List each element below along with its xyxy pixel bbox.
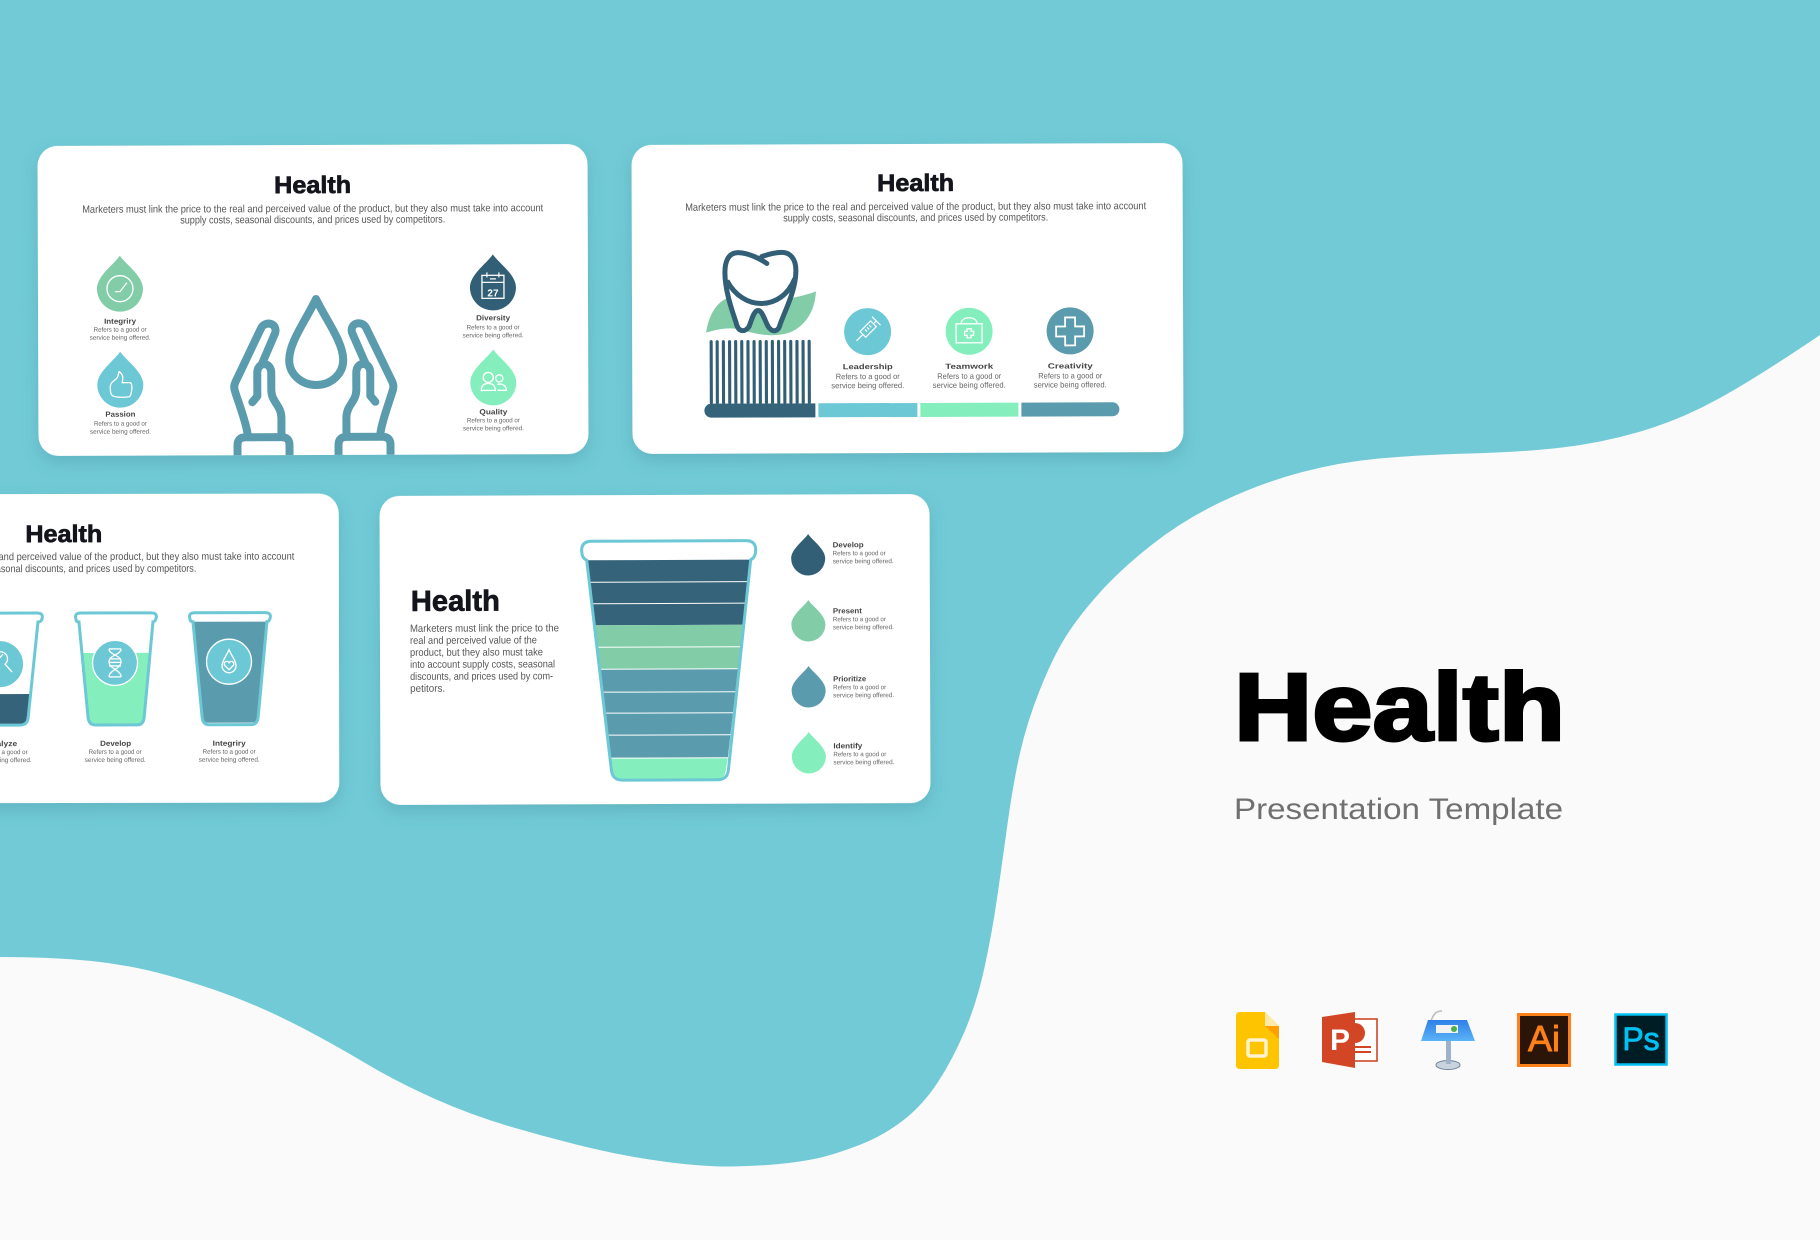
panel: card three cups	[0, 494, 339, 803]
card description: supply costs, seasonal discounts, and prices used by competitors.	[783, 212, 1048, 224]
icon: Adobe Illustrator	[1518, 1014, 1570, 1066]
white curved background shape	[0, 335, 1820, 1240]
card description	[685, 200, 1146, 225]
item: Integriry: Integriry	[104, 317, 137, 326]
item: Diversity: Refers to a good or	[467, 324, 520, 331]
icon: tooth with gum	[706, 252, 816, 335]
item: Diversity: 27	[487, 288, 499, 299]
card heading: Health	[25, 521, 102, 548]
legend: Present: Present	[833, 606, 862, 615]
item: Passion: Refers to a good or	[94, 421, 148, 428]
card description: real and perceived value of the	[410, 634, 537, 647]
chart: cup integriry: Integriry	[213, 739, 247, 748]
item: Creativity: Refers to a good or	[1038, 371, 1103, 381]
card heading: Health	[877, 170, 954, 197]
card description	[0, 551, 294, 575]
icon: Keynote	[1421, 1011, 1475, 1070]
chart: layered cup	[582, 541, 756, 780]
item: Quality	[463, 349, 524, 432]
legend: Develop	[791, 534, 894, 576]
chart: cup analyze	[0, 613, 43, 764]
legend: Prioritize	[792, 666, 894, 708]
panel: card tooth and toothbrush	[631, 143, 1184, 454]
item: Quality: Refers to a good or	[467, 417, 521, 424]
legend: Prioritize: service being offered.	[833, 692, 894, 699]
title: Health	[1234, 654, 1565, 761]
item: Leadership: Refers to a good or	[836, 372, 900, 381]
chart: cup integriry: service being offered.	[199, 757, 260, 764]
card description: Marketers must link the price to the	[410, 622, 559, 635]
item: Creativity: Creativity	[1048, 361, 1094, 371]
legend: Present: Refers to a good or	[833, 616, 887, 623]
card heading: Health	[274, 172, 351, 199]
item: Quality: Quality	[479, 407, 508, 416]
item: Integriry: Refers to a good or	[94, 327, 147, 334]
panel: card large layered cup	[379, 494, 931, 805]
chart: cup integriry	[189, 613, 271, 764]
icon: Adobe Illustrator: Ai	[1528, 1018, 1560, 1059]
item: Passion: service being offered.	[90, 429, 151, 436]
chart: cup integriry: Refers to a good or	[203, 749, 256, 756]
icon: toothbrush bristles	[711, 341, 809, 403]
legend: Identify	[792, 732, 895, 774]
item: Creativity: service being offered.	[1034, 380, 1107, 390]
card heading: Health	[411, 586, 500, 618]
item: Integriry	[89, 256, 151, 342]
legend: Prioritize: Refers to a good or	[833, 684, 887, 691]
legend: Identify: Refers to a good or	[833, 751, 887, 758]
item: Quality: service being offered.	[463, 425, 524, 432]
icon: Google Slides	[1236, 1012, 1279, 1069]
toothbrush handle bar	[704, 402, 1119, 418]
item: Leadership	[831, 308, 904, 390]
chart: cup develop: service being offered.	[85, 757, 146, 764]
item: Teamwork	[933, 308, 1006, 390]
card description	[82, 202, 543, 227]
legend: Identify: Identify	[833, 741, 863, 750]
item: Teamwork: Refers to a good or	[937, 372, 1002, 381]
legend: Develop: service being offered.	[833, 558, 894, 565]
icon: Adobe Photoshop	[1616, 1014, 1666, 1064]
card description: Marketers must link the price to the real and perceived value of the product, but they also must take into account	[82, 202, 543, 216]
item: Creativity	[1034, 307, 1107, 390]
legend: Present	[791, 600, 894, 642]
item: Integriry: service being offered.	[90, 335, 151, 342]
chart: cup develop: Develop	[100, 739, 132, 748]
chart: cup develop	[75, 613, 157, 764]
icon: PowerPoint	[1322, 1012, 1377, 1068]
legend: Prioritize: Prioritize	[833, 674, 866, 683]
panel: card water drop and hands	[37, 144, 589, 466]
item: Diversity	[462, 254, 524, 339]
card description: into account supply costs, seasonal	[410, 658, 555, 671]
card description: discounts, and prices used by com-	[410, 670, 554, 683]
item: Diversity: service being offered.	[463, 332, 524, 339]
legend: Develop: Refers to a good or	[833, 550, 886, 557]
item: Leadership: Leadership	[843, 362, 893, 371]
item: Leadership: service being offered.	[831, 381, 904, 390]
card description: supply costs, seasonal discounts, and prices used by competitors.	[180, 214, 445, 226]
icon: Adobe Photoshop: Ps	[1622, 1021, 1660, 1057]
icon: PowerPoint: P	[1330, 1024, 1350, 1057]
chart: cup develop: Refers to a good or	[89, 749, 142, 756]
card description	[410, 622, 559, 695]
item: Diversity: Diversity	[476, 313, 511, 322]
card description: petitors.	[410, 683, 445, 695]
legend: Identify: service being offered.	[833, 759, 895, 766]
subtitle: Presentation Template	[1234, 793, 1563, 826]
card description: Marketers must link the price to the real and perceived value of the product, but they also must take into account	[685, 200, 1146, 214]
legend: Develop: Develop	[833, 540, 864, 549]
item: Teamwork: service being offered.	[933, 381, 1006, 390]
icon: hands holding water drop	[234, 299, 394, 465]
item: Teamwork: Teamwork	[945, 362, 994, 371]
item: Passion: Passion	[105, 410, 136, 419]
legend: Present: service being offered.	[833, 624, 894, 631]
item: Passion	[90, 352, 151, 436]
card description: product, but they also must take	[410, 646, 543, 659]
